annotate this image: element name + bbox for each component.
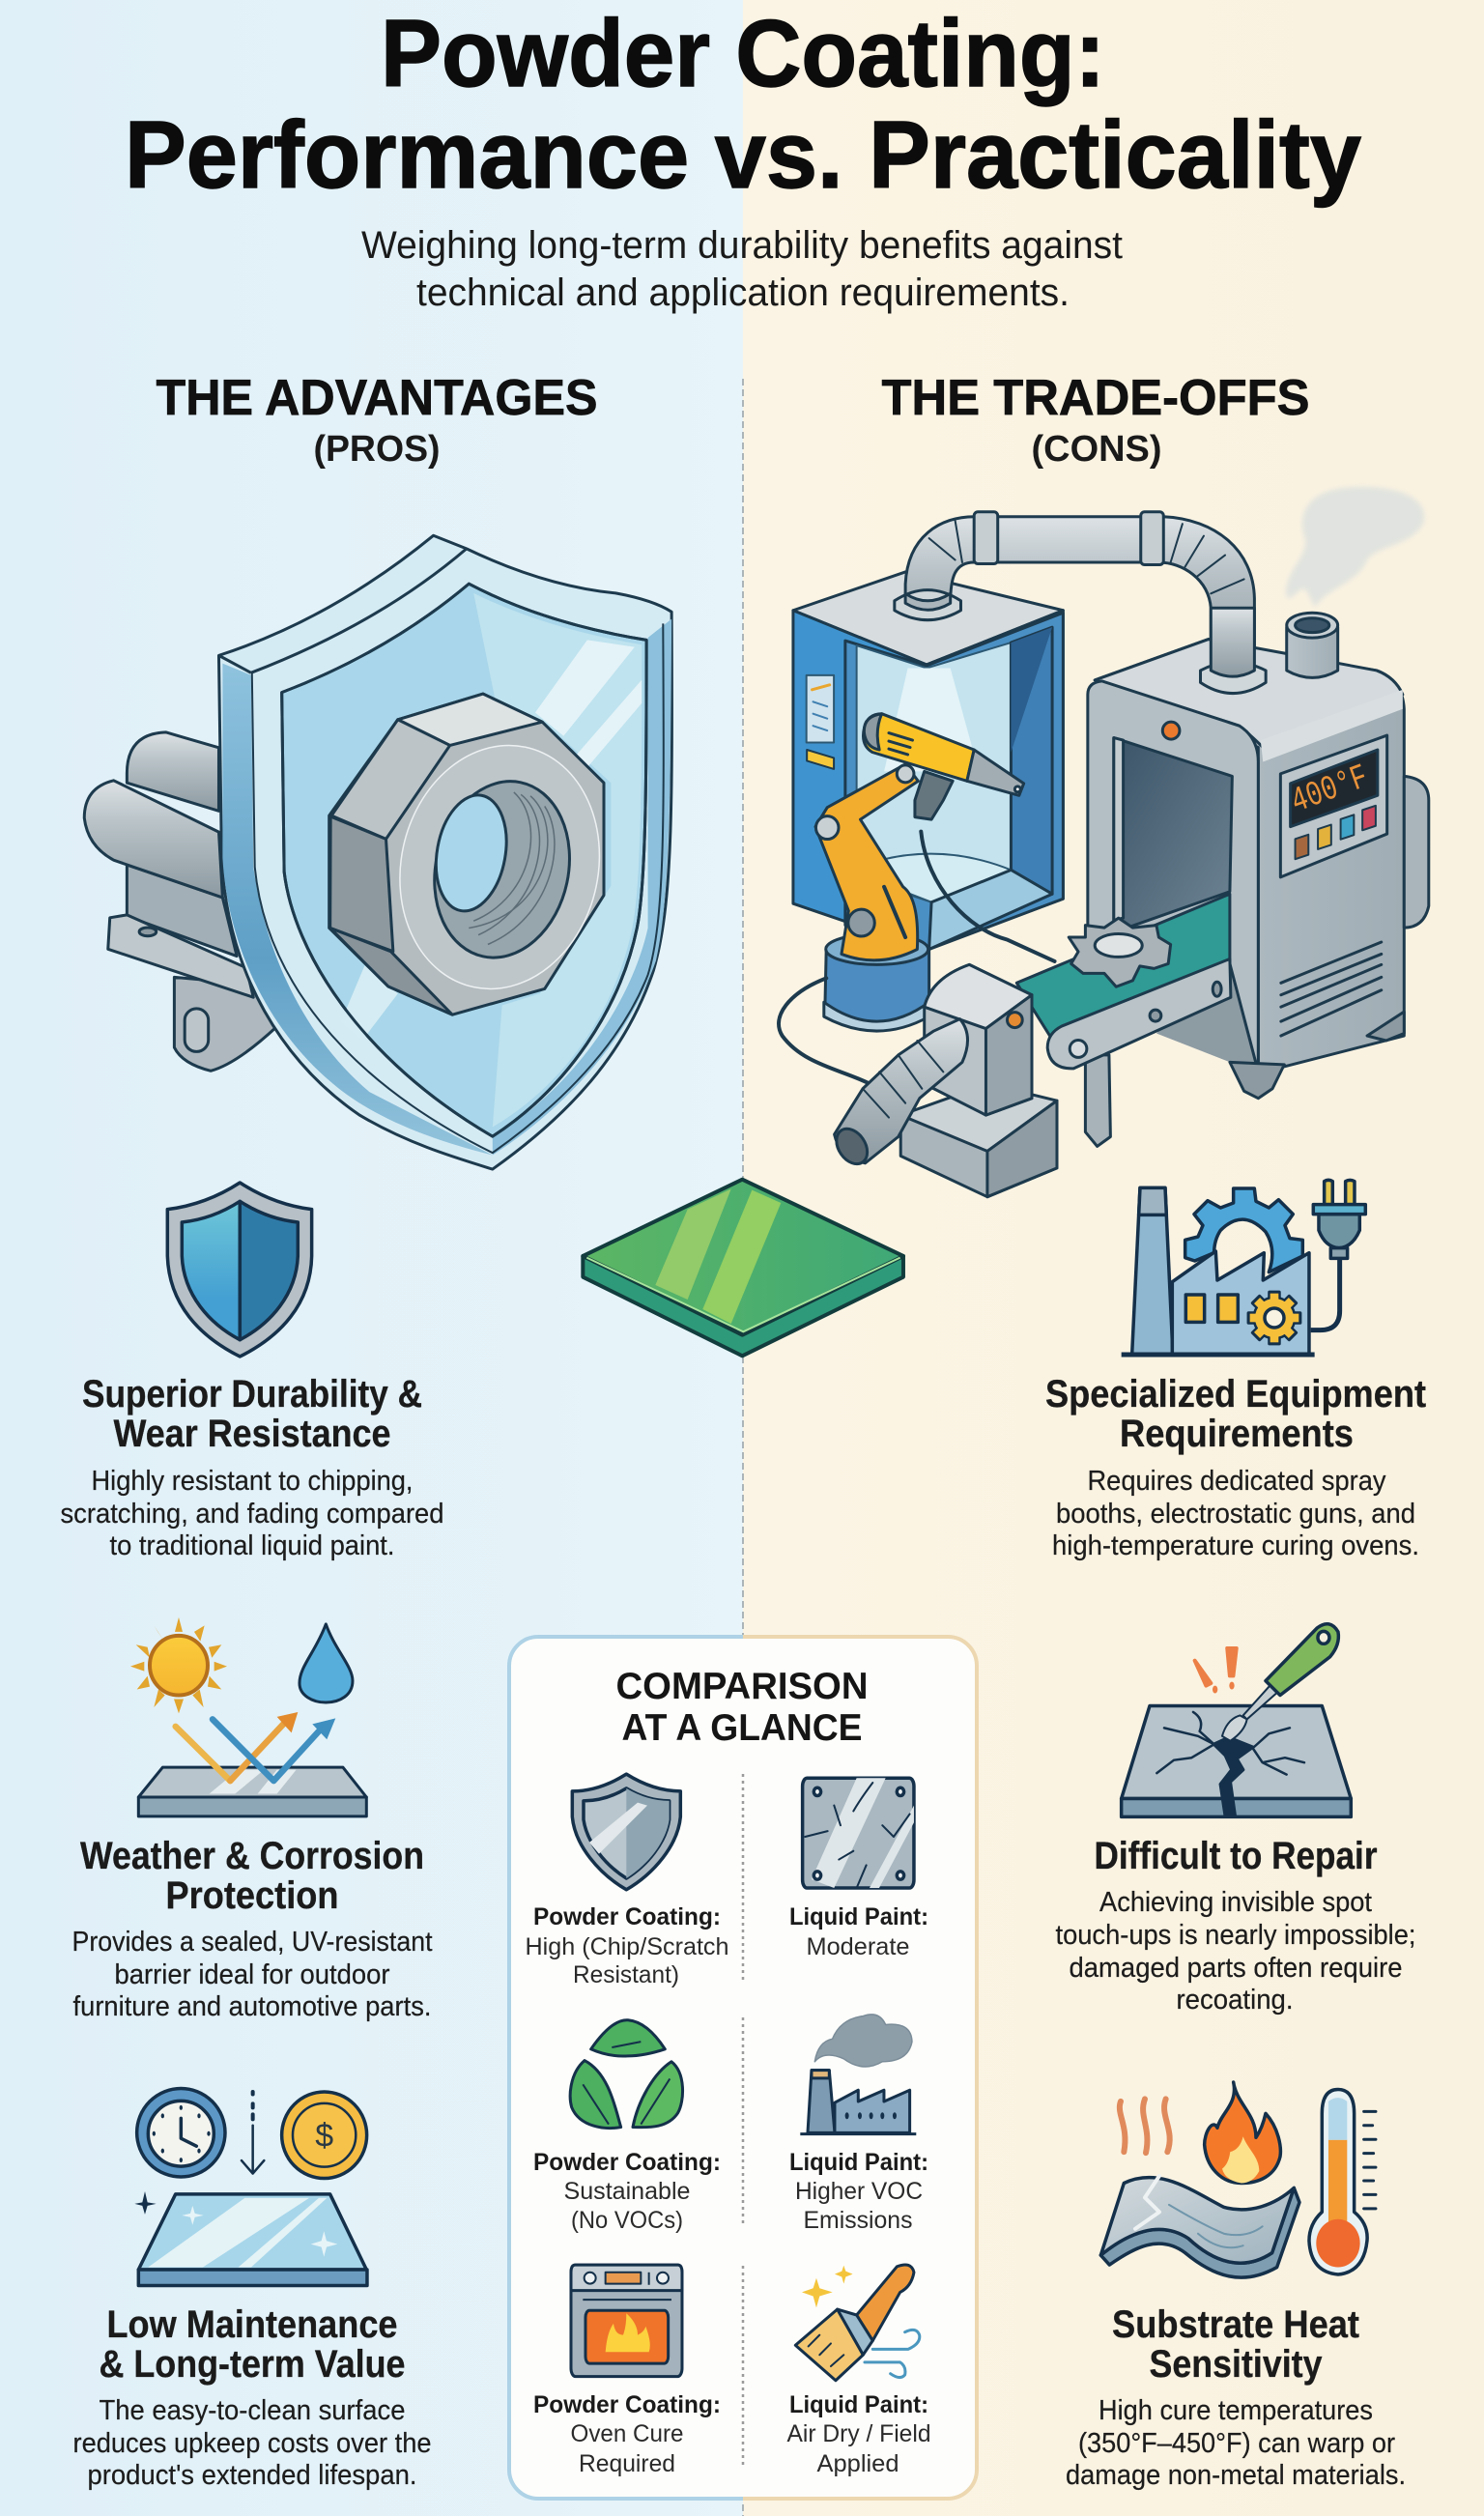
illustration: spray booth, robot arm, curing oven and conveyor xyxy=(779,487,1429,1197)
hex nut xyxy=(329,694,622,1015)
duct xyxy=(905,517,1254,671)
comparison: curing, powder coating xyxy=(533,2265,721,2477)
icon: factory, gears and plug xyxy=(1122,1180,1365,1355)
item: specialized equipment: Requires dedicated spray xyxy=(1088,1466,1386,1497)
item: substrate heat sensitivity: damage non-metal materials. xyxy=(1066,2460,1406,2491)
comparison: curing, liquid paint: Applied xyxy=(817,2450,899,2477)
item: substrate heat sensitivity: Sensitivity xyxy=(1150,2343,1323,2386)
center dashed divider xyxy=(742,379,744,2516)
item: superior durability: Wear Resistance xyxy=(114,1413,390,1455)
item: substrate heat sensitivity: High cure temperatures xyxy=(1099,2395,1373,2426)
comparison: durability, powder coating: High (Chip/Scratch xyxy=(526,1933,728,1960)
heading: the advantages: (PROS) xyxy=(313,429,441,470)
comparison: curing, liquid paint xyxy=(786,2265,931,2477)
heading: the trade-offs xyxy=(881,370,1310,470)
smoke xyxy=(1286,487,1424,608)
spray gun xyxy=(864,714,974,781)
illustration: shield protecting a hex nut and bracket xyxy=(84,535,671,1169)
item: superior durability: Highly resistant to chipping, xyxy=(91,1466,414,1497)
powder blower xyxy=(900,1089,1057,1197)
item: low maintenance and long-term value: reduces upkeep costs over the xyxy=(73,2428,431,2459)
item: low maintenance and long-term value xyxy=(73,2088,431,2491)
comparison: durability, powder coating xyxy=(526,1774,728,1988)
item: difficult to repair: Achieving invisible spot xyxy=(1099,1887,1372,1918)
title: Powder Coating: xyxy=(381,0,1105,106)
illustration: coated green panel xyxy=(583,1180,903,1356)
gear on conveyor xyxy=(1069,918,1171,986)
item: specialized equipment: Specialized Equipment xyxy=(1045,1373,1426,1415)
item: low maintenance and long-term value: & Long-term Value xyxy=(99,2343,406,2386)
panel heading xyxy=(616,1666,868,1749)
panel heading: AT A GLANCE xyxy=(622,1707,862,1749)
comparison: sustainability, liquid paint: Emissions xyxy=(804,2207,912,2234)
comparison: sustainability, powder coating: Sustainable xyxy=(564,2178,690,2205)
heading: the advantages xyxy=(157,370,597,470)
heading: the trade-offs: (CONS) xyxy=(1032,429,1161,470)
robot arm xyxy=(825,938,929,1029)
comparison: sustainability, powder coating: (No VOCs) xyxy=(571,2207,683,2234)
comparison: durability, liquid paint: Moderate xyxy=(806,1933,910,1960)
icon: cracked panel and scraper xyxy=(1122,1624,1351,1816)
icon: clock, coin and clean panel: $ xyxy=(315,2118,333,2155)
item: superior durability: scratching, and fading compared xyxy=(60,1499,444,1530)
item: weather and corrosion protection: furniture and automotive parts. xyxy=(73,1991,431,2022)
title: Performance vs. Practicality xyxy=(125,101,1361,208)
item: weather and corrosion protection: Weather & Corrosion xyxy=(80,1835,424,1877)
item: weather and corrosion protection: barrier ideal for outdoor xyxy=(114,1959,390,1990)
item: superior durability: Superior Durability & xyxy=(82,1373,422,1415)
item: difficult to repair: touch-ups is nearly impossible; xyxy=(1055,1920,1416,1951)
item: difficult to repair: recoating. xyxy=(1177,1985,1293,2016)
item: substrate heat sensitivity: Substrate Heat xyxy=(1112,2303,1359,2346)
comparison: curing, liquid paint: Air Dry / Field xyxy=(786,2420,931,2447)
item: weather and corrosion protection: Provides a sealed, UV-resistant xyxy=(71,1927,433,1958)
oven control panel xyxy=(1280,735,1387,877)
comparison: curing, powder coating: Required xyxy=(579,2450,675,2477)
comparison: durability, liquid paint: Liquid Paint: xyxy=(789,1903,928,1930)
heading: the trade-offs: THE TRADE-OFFS xyxy=(881,370,1310,426)
icon: warped panel, flame and thermometer xyxy=(1100,2082,1376,2277)
item: low maintenance and long-term value: product's extended lifespan. xyxy=(87,2460,417,2491)
icon: blue shield xyxy=(167,1183,312,1357)
item: specialized equipment: Requirements xyxy=(1120,1413,1354,1455)
item: low maintenance and long-term value: Low Maintenance xyxy=(106,2303,398,2346)
item: difficult to repair xyxy=(1055,1624,1416,2016)
conveyor xyxy=(1016,894,1230,1036)
item: difficult to repair: damaged parts often require xyxy=(1069,1953,1403,1984)
comparison: sustainability, liquid paint xyxy=(789,2015,928,2234)
item: specialized equipment: booths, electrostatic guns, and xyxy=(1056,1499,1415,1530)
booth xyxy=(793,572,1063,665)
subtitle xyxy=(361,224,1123,314)
comparison: sustainability, liquid paint: Liquid Paint: xyxy=(789,2149,928,2176)
comparison: curing, liquid paint: Liquid Paint: xyxy=(789,2391,928,2418)
icon: clock, coin and clean panel xyxy=(134,2088,367,2285)
icon: sun, water drop and reflecting arrows xyxy=(130,1617,366,1816)
item: substrate heat sensitivity: (350°F–450°F) can warp or xyxy=(1078,2428,1395,2459)
comparison: curing, powder coating: Powder Coating: xyxy=(533,2391,721,2418)
title xyxy=(125,0,1361,208)
subtitle: technical and application requirements. xyxy=(416,272,1070,314)
panel: comparison at a glance xyxy=(509,1637,977,2499)
comparison: sustainability, powder coating xyxy=(533,2020,721,2234)
oven xyxy=(1095,640,1404,1073)
item: low maintenance and long-term value: The easy-to-clean surface xyxy=(99,2395,406,2426)
comparison: curing, powder coating: Oven Cure xyxy=(570,2420,684,2447)
item: superior durability: to traditional liquid paint. xyxy=(110,1530,394,1561)
item: specialized equipment xyxy=(1045,1180,1426,1561)
comparison: durability, powder coating: Resistant) xyxy=(573,1961,679,1988)
item: specialized equipment: high-temperature curing ovens. xyxy=(1052,1530,1419,1561)
comparison: durability, liquid paint xyxy=(789,1778,928,1960)
item: weather and corrosion protection xyxy=(71,1617,433,2022)
item: substrate heat sensitivity xyxy=(1066,2082,1406,2491)
heading: the advantages: THE ADVANTAGES xyxy=(157,370,597,426)
comparison: durability, powder coating: Powder Coating: xyxy=(533,1903,721,1930)
item: difficult to repair: Difficult to Repair xyxy=(1094,1835,1378,1877)
item: superior durability xyxy=(60,1183,444,1561)
comparison: sustainability, liquid paint: Higher VOC xyxy=(795,2178,923,2205)
subtitle: Weighing long-term durability benefits against xyxy=(361,224,1123,267)
oven control panel: 400°F xyxy=(1286,758,1373,822)
comparison: sustainability, powder coating: Powder Coating: xyxy=(533,2149,721,2176)
item: weather and corrosion protection: Protection xyxy=(166,1874,338,1917)
panel heading: COMPARISON xyxy=(616,1666,868,1707)
